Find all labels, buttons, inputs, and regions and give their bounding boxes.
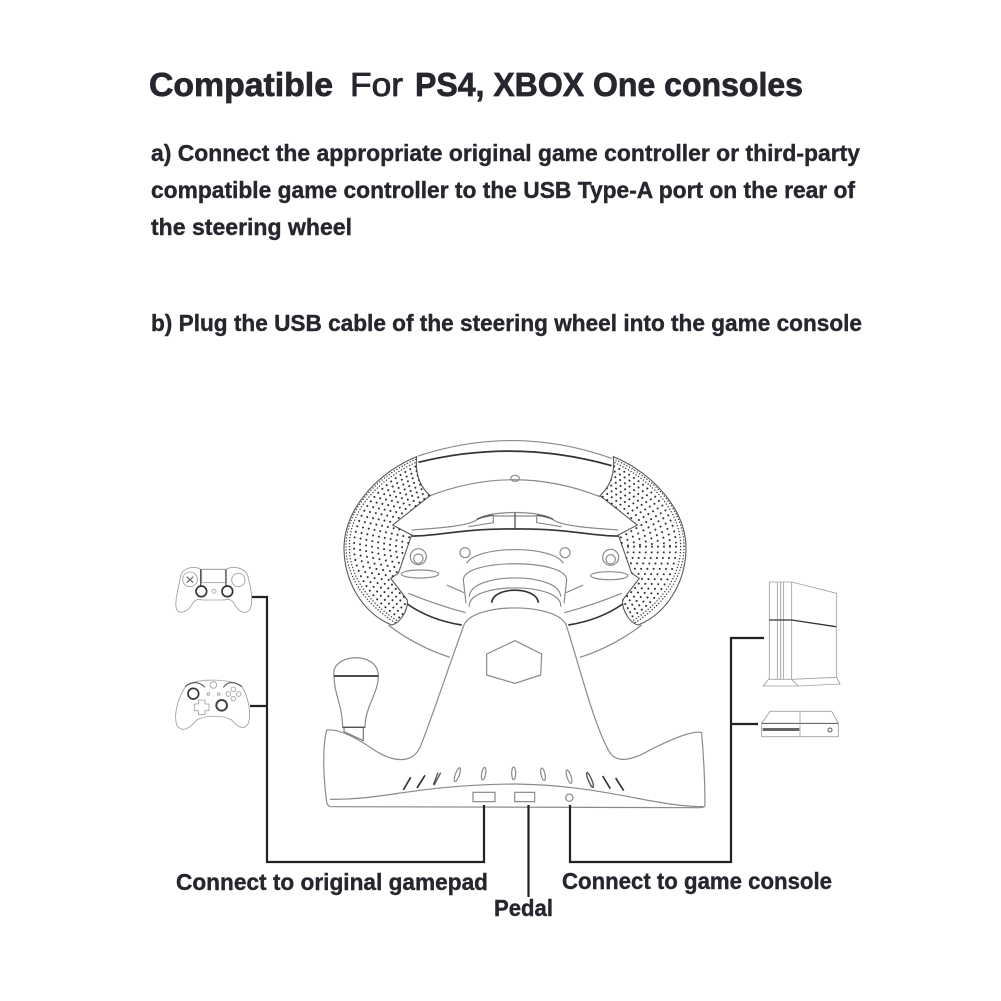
icon: Xbox One console (762, 711, 838, 737)
title (149, 66, 803, 103)
wheel buttons and spokes (401, 548, 628, 613)
text block: step b: b) Plug the USB cable of the steering wheel into the game console (151, 310, 862, 336)
text block: step a: compatible game controller to the USB Type-A port on the rear of (151, 177, 855, 203)
hexagon badge (487, 641, 542, 683)
wheel stand and base (324, 608, 705, 808)
wheel cross bar (412, 512, 618, 536)
label: pedal: Pedal (494, 895, 553, 921)
label: connect to original gamepad: Connect to original gamepad (176, 869, 488, 895)
text block: step a: the steering wheel (151, 214, 352, 240)
hub (463, 550, 567, 607)
right grip outline (600, 457, 686, 625)
icon: PS4 controller (176, 567, 252, 612)
title: Compatible (149, 66, 333, 103)
base vents (403, 767, 624, 791)
connector: controllers to gamepad port (250, 597, 484, 862)
label: connect to game console: Connect to game console (562, 868, 832, 894)
grip perforation dots (345, 458, 685, 624)
title: PS4, XBOX One consoles (415, 66, 803, 103)
wheel top section (418, 441, 612, 497)
connector: game consoles to console port (570, 638, 764, 862)
text block: step a: a) Connect the appropriate original game controller or third-party (151, 140, 860, 166)
base ports (473, 792, 573, 802)
diagram: steering wheel (324, 439, 705, 808)
wheel lower rim (388, 604, 642, 657)
text block: step a (151, 140, 860, 240)
title: For (350, 66, 403, 103)
left grip outline (344, 457, 430, 625)
icon: Xbox controller (176, 680, 250, 729)
gear shifter (334, 658, 378, 741)
base contour (330, 784, 703, 807)
icon: PS4 console (763, 582, 840, 686)
connector: pedal port (527, 805, 530, 897)
